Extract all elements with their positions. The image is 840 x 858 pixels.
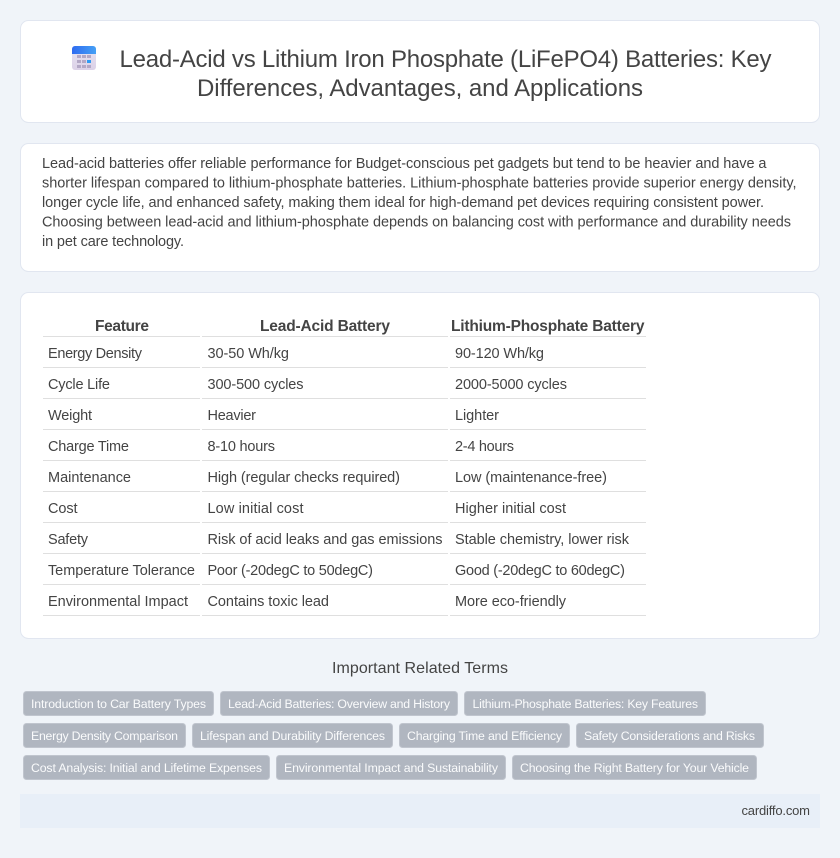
row: energy density xyxy=(48,346,544,362)
tag xyxy=(400,724,570,748)
row: environmental impact: More eco-friendly xyxy=(455,594,567,610)
summary text xyxy=(42,156,796,250)
tag: Lead-Acid Batteries: Overview and History xyxy=(228,697,451,711)
summary text: Choosing between lead-acid and lithium-phosphate depends on balancing cost with performance and durability needs xyxy=(42,215,791,231)
footer xyxy=(20,794,820,828)
row: charge time: 2-4 hours xyxy=(455,439,514,455)
table header: Feature xyxy=(95,318,149,335)
tag: Charging Time and Efficiency xyxy=(407,729,563,743)
tag: Energy Density Comparison xyxy=(31,729,178,743)
row: temperature tolerance: Good (-20degC to 60degC) xyxy=(455,563,625,579)
table header xyxy=(95,318,645,335)
row: cost: Cost xyxy=(48,501,78,517)
row: temperature tolerance xyxy=(48,563,625,579)
row: environmental impact: Contains toxic lead xyxy=(208,594,329,610)
tag xyxy=(24,692,214,716)
row: safety xyxy=(48,532,630,548)
tag: Safety Considerations and Risks xyxy=(584,729,755,743)
title: Differences, Advantages, and Applications xyxy=(197,75,643,102)
row: weight xyxy=(48,408,499,424)
row: cost: Higher initial cost xyxy=(455,501,566,517)
tag: Lithium-Phosphate Batteries: Key Features xyxy=(472,697,698,711)
tag: Environmental Impact and Sustainability xyxy=(284,761,499,775)
row: energy density: 30-50 Wh/kg xyxy=(208,346,289,362)
panel: summary xyxy=(20,144,820,272)
row: safety: Safety xyxy=(48,532,89,548)
title: Lead-Acid vs Lithium Iron Phosphate (LiFePO4) Batteries: Key xyxy=(120,46,772,73)
row: cost: Low initial cost xyxy=(208,501,304,517)
tag xyxy=(512,756,756,780)
row: charge time: 8-10 hours xyxy=(208,439,275,455)
row: cycle life xyxy=(48,377,567,393)
title xyxy=(120,46,772,102)
tag: Introduction to Car Battery Types xyxy=(31,697,206,711)
row: cycle life: 2000-5000 cycles xyxy=(455,377,567,393)
row: cycle life: 300-500 cycles xyxy=(208,377,304,393)
row: maintenance: Low (maintenance-free) xyxy=(455,470,607,486)
row: weight: Weight xyxy=(48,408,92,424)
panel: header xyxy=(20,20,820,122)
row: maintenance: High (regular checks required) xyxy=(208,470,400,486)
row: maintenance: Maintenance xyxy=(48,470,131,486)
row: temperature tolerance: Temperature Tolerance xyxy=(48,563,195,579)
row: environmental impact xyxy=(48,594,567,610)
row: environmental impact: Environmental Impact xyxy=(48,594,188,610)
table header: Lead-Acid Battery xyxy=(260,318,390,335)
row: energy density: 90-120 Wh/kg xyxy=(455,346,544,362)
row: safety: Risk of acid leaks and gas emissions xyxy=(208,532,442,548)
tag: Choosing the Right Battery for Your Vehicle xyxy=(520,761,749,775)
row: temperature tolerance: Poor (-20degC to 50degC) xyxy=(208,563,373,579)
tags: related terms xyxy=(24,692,764,780)
row: safety: Stable chemistry, lower risk xyxy=(455,532,630,548)
row: weight: Heavier xyxy=(208,408,256,424)
row: cycle life: Cycle Life xyxy=(48,377,110,393)
row: energy density: Energy Density xyxy=(48,346,143,362)
tag xyxy=(24,756,270,780)
heading: related terms: Important Related Terms xyxy=(332,660,508,677)
panel: comparison table xyxy=(20,292,820,638)
row: cost xyxy=(48,501,566,517)
tag xyxy=(464,692,706,716)
summary text: shorter lifespan compared to lithium-phosphate batteries. Lithium-phosphate batteries provide superior energy density, xyxy=(42,176,796,192)
table header: Lithium-Phosphate Battery xyxy=(451,318,645,335)
summary text: Lead-acid batteries offer reliable performance for Budget-conscious pet gadgets but tend to be heavier and have a xyxy=(42,156,767,172)
tag xyxy=(192,724,392,748)
row: charge time: Charge Time xyxy=(48,439,129,455)
tag xyxy=(24,724,186,748)
row: charge time xyxy=(48,439,514,455)
tag: Lifespan and Durability Differences xyxy=(200,729,385,743)
row: maintenance xyxy=(48,470,607,486)
tag xyxy=(276,756,506,780)
tag xyxy=(220,692,458,716)
footer: cardiffo.com xyxy=(742,803,810,818)
icon: calendar xyxy=(72,46,96,70)
tag: Cost Analysis: Initial and Lifetime Expenses xyxy=(31,761,262,775)
row: weight: Lighter xyxy=(455,408,499,424)
summary text: longer cycle life, and enhanced safety, making them ideal for high-demand pet devices requiring consistent power. xyxy=(42,195,764,211)
tag xyxy=(576,724,764,748)
summary text: in pet care technology. xyxy=(42,234,184,250)
